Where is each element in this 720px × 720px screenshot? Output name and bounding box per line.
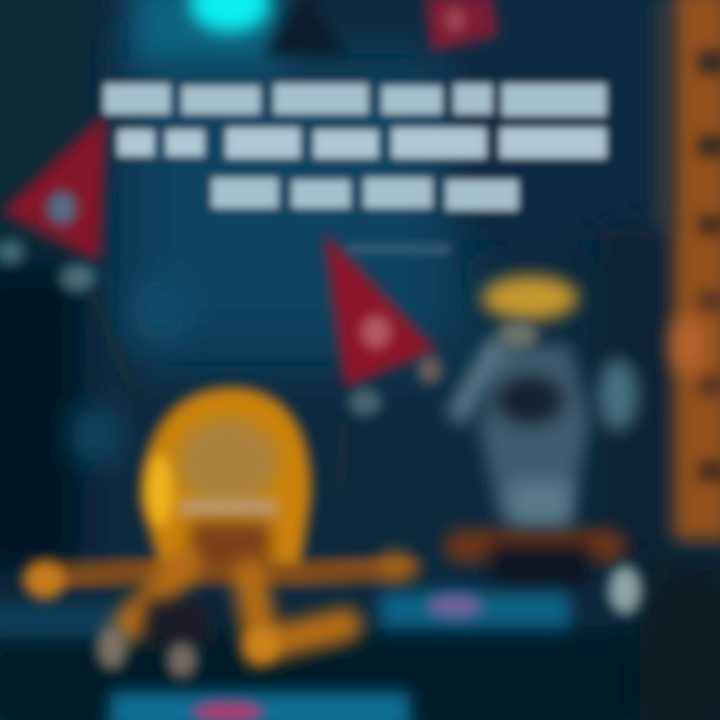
character arms bbox=[40, 565, 405, 580]
figure base bbox=[445, 530, 625, 562]
character jaw bbox=[190, 522, 270, 572]
figure foot bbox=[609, 566, 641, 614]
character feet bbox=[97, 626, 127, 670]
floor strip bbox=[0, 592, 570, 720]
character legs bbox=[130, 565, 345, 645]
icon: dark triangle flag at top bbox=[265, 0, 345, 55]
character mouth band bbox=[178, 500, 278, 516]
character shadow bbox=[145, 600, 210, 645]
title line 1 bbox=[104, 84, 606, 116]
figure torso shadow bbox=[496, 376, 564, 424]
title line 2 bbox=[118, 128, 606, 158]
illustration: orange character bbox=[25, 388, 413, 678]
character right hand bbox=[377, 552, 413, 580]
panel: orange striped column at right bbox=[656, 0, 720, 540]
character visor bbox=[178, 418, 278, 506]
illustration: right figure bbox=[445, 276, 641, 614]
title line 3 bbox=[212, 178, 518, 210]
icon: red flag at top bbox=[425, 0, 498, 52]
glow: cyan light at top bbox=[130, 0, 280, 65]
figure raised arm bbox=[455, 340, 500, 420]
figure body bbox=[480, 345, 590, 520]
subtitle bbox=[345, 244, 450, 254]
character dome highlight bbox=[147, 454, 173, 526]
character boot bbox=[244, 627, 280, 663]
title bbox=[104, 84, 606, 210]
figure right arm bbox=[598, 359, 638, 431]
character left hand bbox=[25, 561, 65, 599]
character dome bbox=[142, 388, 310, 565]
icon: red flag at centre bbox=[324, 232, 442, 490]
figure leg bbox=[510, 480, 570, 525]
icon: large red flag at left bbox=[0, 112, 135, 400]
figure hat bbox=[482, 276, 578, 320]
figure face bbox=[498, 321, 538, 349]
